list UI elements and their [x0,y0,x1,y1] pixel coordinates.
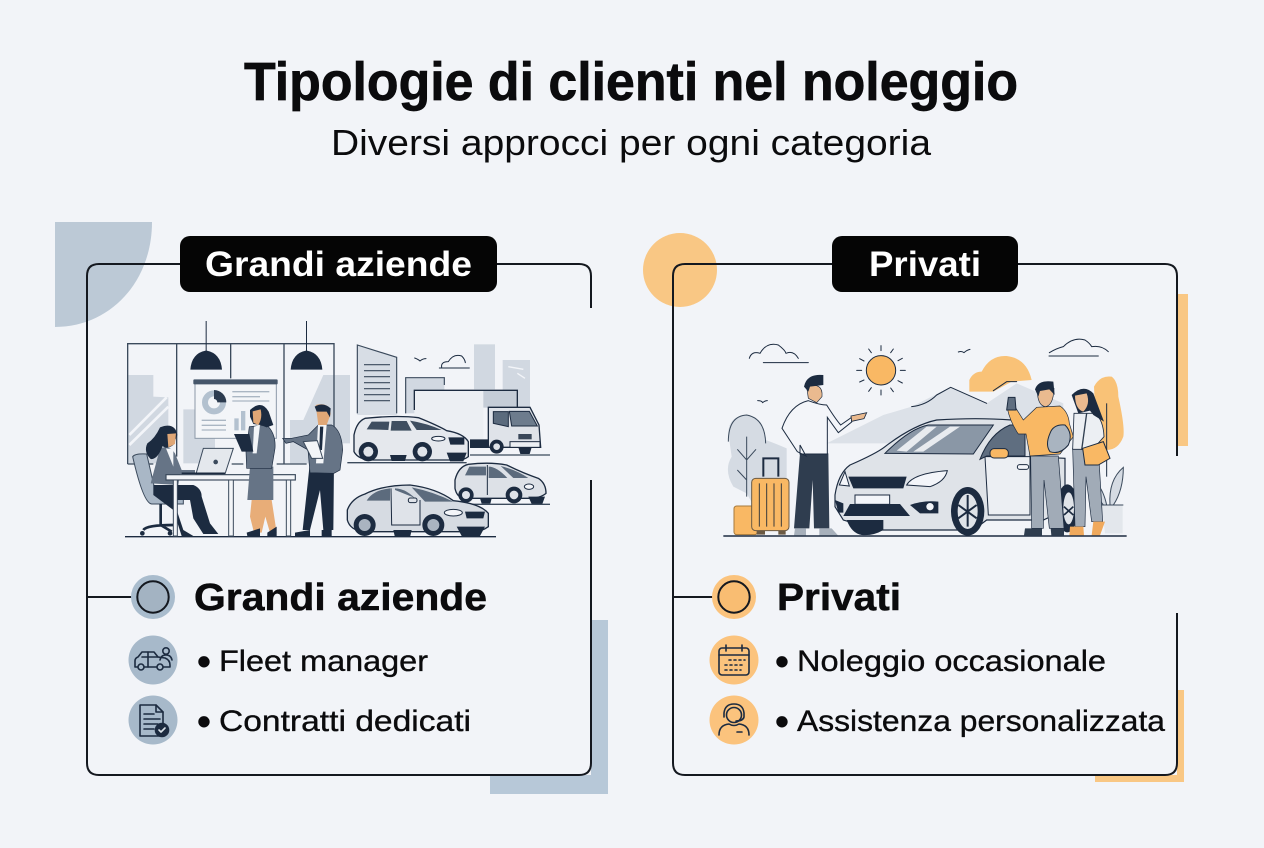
bullet: fleet manager [197,638,428,684]
marker: privati [674,575,756,619]
bullet: contratti dedicati: • [197,698,211,744]
car [835,419,1078,536]
icon: calendar [710,636,758,684]
sedan [347,485,488,536]
sun [857,346,905,395]
decoration: orange side bar [1177,294,1188,446]
standing woman [234,405,277,536]
tree [728,403,1107,517]
bullet: fleet manager: Fleet manager [219,645,428,678]
tower [357,345,444,415]
desk and laptop [166,448,295,536]
subtitle: Diversi approcci per ogni categoria [331,122,932,163]
bullet: noleggio occasionale: • [775,638,789,684]
bullet: assistenza personalizzata: • [775,698,789,744]
presentation board [193,379,278,438]
bullet: noleggio occasionale [775,638,1106,684]
pendant lamps [190,321,322,370]
luggage [734,458,789,535]
bullet: fleet manager: • [197,638,211,684]
panel outline [673,264,1177,775]
ground [125,535,496,539]
bullet: assistenza personalizzata: Assistenza personalizzata [797,705,1165,738]
decoration: orange corner bracket [1095,690,1184,782]
marker: grandi aziende [88,575,175,619]
standing man [283,404,343,536]
icon: support agent [710,696,758,744]
bullet: assistenza personalizzata [775,698,1165,744]
bullet: noleggio occasionale: Noleggio occasionale [797,645,1106,678]
cloud and bird [415,355,469,368]
ground [723,534,1127,538]
city background [128,344,530,463]
window frame [128,344,334,464]
man with open hand [782,375,867,535]
plant and pot [1097,467,1123,533]
heading pill: grandi aziende [180,236,497,292]
bullet: contratti dedicati: Contratti dedicati [219,705,471,738]
section heading: grandi aziende: Grandi aziende [194,577,487,619]
woman with bag [1069,389,1110,535]
illustration: office and company fleet [125,321,550,537]
orange hill and mountain [969,356,1032,392]
icon: contract [128,696,178,744]
title: Tipologie di clienti nel noleggio [244,52,1018,112]
panel outline [87,264,591,775]
clouds and birds [749,339,1108,403]
bullet: contratti dedicati [197,698,471,744]
panel: privati [643,233,1188,782]
truck [414,390,550,455]
heading pill: privati [832,236,1018,292]
icon: fleet manager [128,636,178,684]
decoration: blue quarter shape [55,222,152,327]
heading pill: privati: Privati [869,245,981,284]
section heading: privati: Privati [777,577,901,619]
panel: grandi aziende [55,222,608,794]
SUV [347,416,468,463]
decoration: orange circle [643,233,717,307]
illustration: people renting a car [723,339,1127,536]
heading pill: grandi aziende: Grandi aziende [205,245,472,284]
man with keys [1007,381,1073,535]
decoration: blue corner bracket [490,620,608,794]
small car [455,463,550,504]
seated woman [133,426,218,536]
